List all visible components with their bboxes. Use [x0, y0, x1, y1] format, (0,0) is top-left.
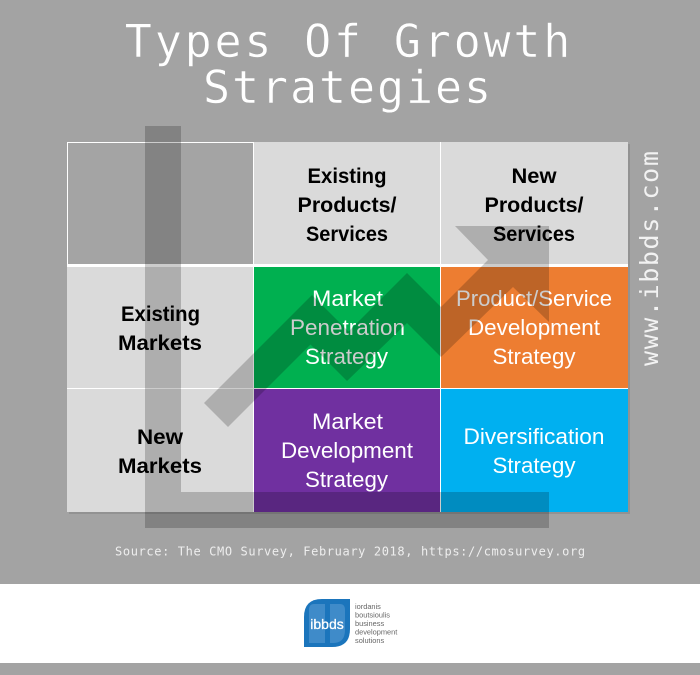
column header: existing products: Products/	[298, 194, 397, 217]
L-shaped axis overlay	[145, 126, 549, 528]
row header: existing markets: Existing	[121, 303, 200, 326]
column header: existing products: Services	[306, 223, 388, 246]
cell: market penetration strategy: Penetration	[290, 315, 405, 340]
website vertical text: www.ibbds.com	[635, 150, 664, 366]
column header: existing products	[254, 142, 440, 264]
panel: strategy matrix	[67, 142, 630, 514]
source note: Source: The CMO Survey, February 2018, https://cmosurvey.org	[115, 544, 586, 558]
cell: market penetration strategy: Market	[312, 286, 383, 311]
cell: product/service development strategy	[441, 267, 628, 388]
logo wordmark: solutions	[355, 636, 384, 645]
cell: diversification strategy: Strategy	[492, 453, 576, 478]
title: Types Of Growth	[125, 15, 573, 68]
column header: new products: Services	[493, 223, 575, 246]
column header: new products: Products/	[484, 194, 584, 217]
logo wordmark	[355, 602, 397, 645]
cell: diversification strategy: Diversification	[464, 424, 604, 449]
row header: new markets: Markets	[118, 455, 202, 478]
cell: market penetration strategy: Strategy	[305, 344, 388, 369]
cell: market development strategy: Strategy	[305, 467, 388, 492]
logo wordmark: development	[355, 628, 397, 636]
cell: product/service development strategy: Product/Service	[456, 286, 612, 311]
cell: product/service development strategy: Strategy	[492, 344, 576, 369]
cell: market development strategy: Market	[312, 409, 383, 434]
arrow: rising zigzag growth arrow	[204, 226, 549, 427]
title: Strategies	[203, 61, 493, 114]
footer band	[0, 584, 700, 663]
row header: existing markets	[67, 267, 253, 388]
column header: existing products: Existing	[308, 165, 386, 188]
cell: diversification strategy	[441, 389, 628, 512]
cell: market development strategy: Development	[281, 438, 413, 463]
column header: new products	[441, 142, 628, 264]
row header: new markets: New	[137, 426, 184, 449]
empty corner cell	[68, 143, 253, 264]
icon: ibbds logo: ibbds	[310, 616, 344, 632]
cell: market penetration strategy	[254, 267, 440, 388]
logo wordmark: business	[355, 619, 384, 628]
icon: ibbds logo	[304, 599, 350, 647]
logo wordmark: iordanis	[355, 602, 381, 611]
title	[125, 15, 573, 114]
column header: new products: New	[512, 165, 557, 188]
row header: new markets	[67, 389, 253, 512]
logo wordmark: boutsioulis	[355, 610, 390, 620]
cell: product/service development strategy: Development	[468, 315, 600, 340]
cell: market development strategy	[254, 389, 440, 512]
row header: existing markets: Markets	[118, 332, 202, 355]
